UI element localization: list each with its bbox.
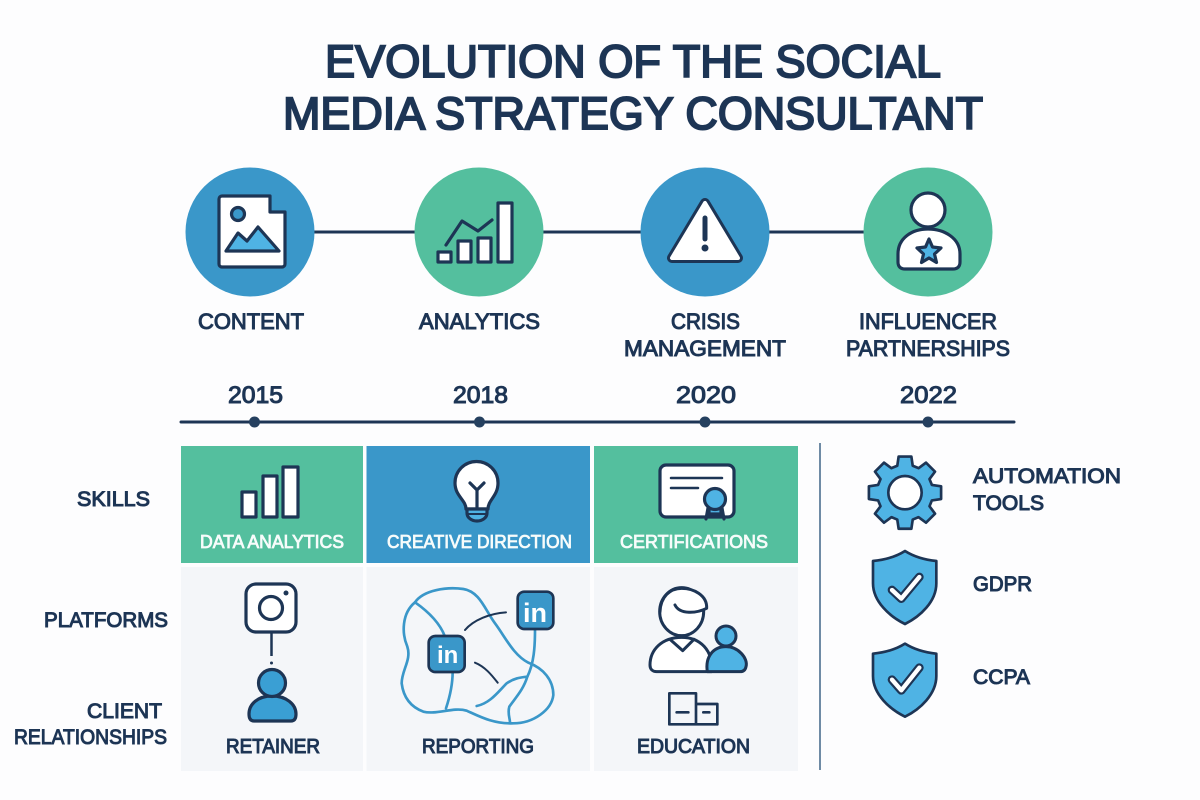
panel: reporting <box>366 567 590 771</box>
icon: light bulb <box>455 462 498 521</box>
panel: certifications: CERTIFICATIONS <box>620 532 768 552</box>
milestone labels: CONTENT <box>198 309 304 334</box>
panel: retainer <box>181 567 363 771</box>
milestone labels: INFLUENCER <box>859 309 997 334</box>
item: automation tools <box>869 457 1121 529</box>
icon: books <box>669 693 717 724</box>
linkedin badge labels: in <box>437 642 458 669</box>
icon: instagram <box>246 584 296 632</box>
year labels: 2015 <box>228 382 283 409</box>
item: gdpr: GDPR <box>973 573 1032 596</box>
milestone labels: ANALYTICS <box>419 309 540 334</box>
year labels: 2022 <box>900 382 957 409</box>
year labels <box>228 382 957 409</box>
panel: data analytics: DATA ANALYTICS <box>200 532 344 552</box>
title: MEDIA STRATEGY CONSULTANT <box>283 88 983 139</box>
connector lines between milestones <box>312 230 866 234</box>
row labels: SKILLS <box>77 488 150 511</box>
panel: reporting: REPORTING <box>422 736 534 758</box>
icon: mentor and student <box>650 588 746 672</box>
milestone: analytics <box>414 168 544 296</box>
item: ccpa: CCPA <box>973 666 1030 689</box>
milestone: content <box>186 168 314 296</box>
panel: creative direction <box>366 446 590 563</box>
linkedin badge labels <box>437 598 547 669</box>
icon: gear <box>869 457 941 529</box>
milestone labels: MANAGEMENT <box>624 336 786 361</box>
panel: retainer: RETAINER <box>226 736 320 758</box>
icon: client person <box>249 670 296 721</box>
milestone: crisis management <box>640 168 770 296</box>
item: automation tools: AUTOMATION <box>973 465 1121 488</box>
year labels: 2018 <box>453 382 508 409</box>
item: ccpa <box>873 644 1030 717</box>
milestone labels: CRISIS <box>671 309 740 334</box>
title: EVOLUTION OF THE SOCIAL <box>325 36 941 87</box>
panel: education <box>594 567 798 771</box>
item: gdpr <box>873 551 1032 624</box>
icon: bar chart <box>242 467 298 517</box>
title <box>283 36 983 139</box>
panel: creative direction: CREATIVE DIRECTION <box>387 532 572 552</box>
icon: shield check <box>873 644 936 717</box>
milestone labels: PARTNERSHIPS <box>846 336 1010 361</box>
item: automation tools: TOOLS <box>973 492 1044 515</box>
row labels: CLIENT <box>87 700 162 723</box>
timeline axis <box>181 416 1014 428</box>
icon: linkedin network <box>402 588 553 723</box>
row labels: PLATFORMS <box>44 609 168 632</box>
icon: image file <box>219 196 285 267</box>
linkedin badge labels: in <box>523 598 547 628</box>
icon: warning triangle <box>672 203 738 258</box>
icon: person with star <box>898 193 960 269</box>
connector: instagram to client <box>270 633 273 664</box>
milestone labels <box>198 309 1010 361</box>
icon: growth chart <box>438 203 512 262</box>
panel: education: EDUCATION <box>637 736 750 758</box>
milestone: influencer partnerships <box>864 168 992 296</box>
panel: data analytics <box>181 446 363 563</box>
panel: certifications <box>594 446 798 563</box>
row labels <box>14 488 168 749</box>
icon: certificate <box>660 465 734 519</box>
icon: shield check <box>873 551 936 624</box>
divider <box>819 443 821 770</box>
year labels: 2020 <box>676 382 736 409</box>
row labels: RELATIONSHIPS <box>14 726 167 749</box>
